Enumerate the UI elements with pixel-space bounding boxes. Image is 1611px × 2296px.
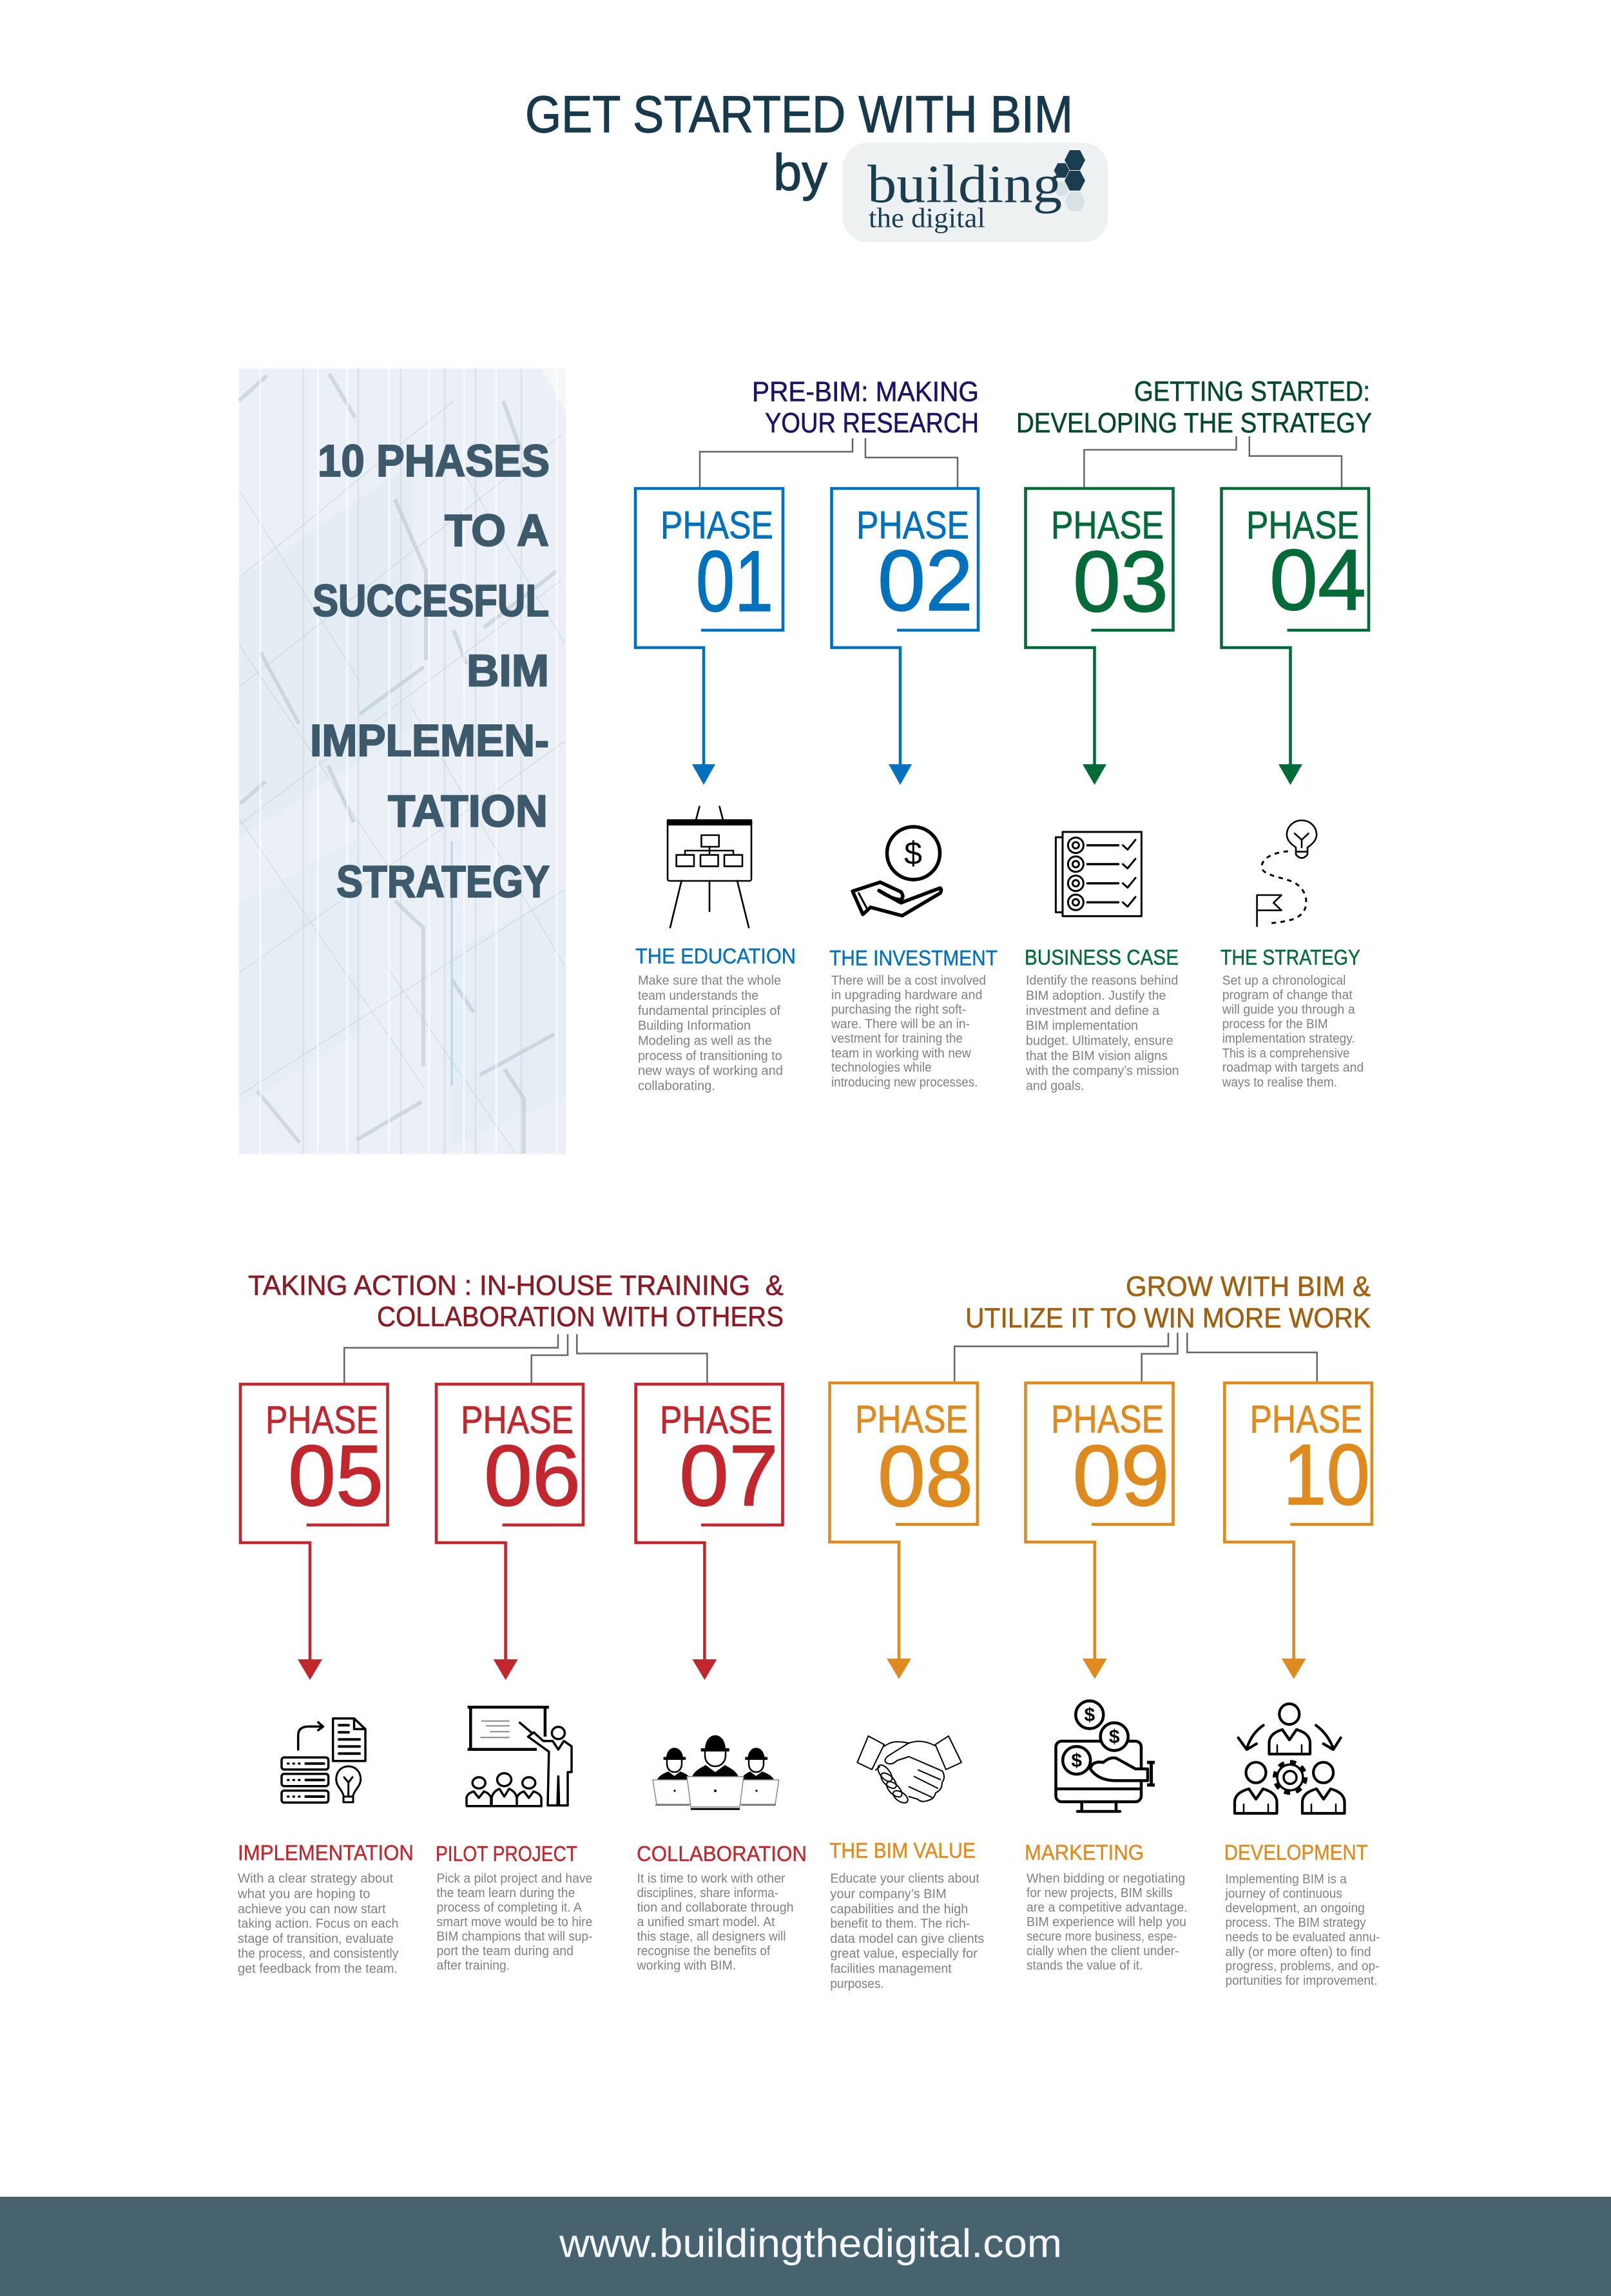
section heading: pre-BIM: PRE-BIM: MAKING <box>752 376 979 407</box>
text block: development: journey of continuous <box>1225 1887 1342 1901</box>
text block: the BIM value: THE BIM VALUE <box>829 1839 976 1863</box>
panel: phase 04 <box>1222 488 1369 785</box>
title: GET STARTED WITH BIM <box>525 86 1073 144</box>
text block: implementation: stage of transition, evaluate <box>238 1932 394 1946</box>
icon: monitor with coins and hand: $ <box>1084 1704 1095 1726</box>
panel: phase 01: 01 <box>696 534 773 630</box>
text block: the investment: vestment for training the <box>831 1032 963 1046</box>
text block: business case: and goals. <box>1026 1079 1085 1094</box>
text block: development: ally (or more often) to find <box>1226 1945 1371 1959</box>
text block: the strategy: This is a comprehensive <box>1222 1047 1349 1061</box>
text block: pilot project: port the team during and <box>437 1944 574 1958</box>
text block: development: development, an ongoing <box>1226 1902 1365 1916</box>
text block: collaboration: a unified smart model. At <box>637 1915 775 1929</box>
icon: strategy road with bulb and flag <box>1257 820 1317 926</box>
text block: marketing: secure more business, espe- <box>1027 1930 1177 1944</box>
text block: pilot project: Pick a pilot project and have <box>437 1872 592 1886</box>
text block: the investment: ware. There will be an in- <box>831 1018 970 1032</box>
text block: collaboration: this stage, all designers will <box>637 1930 786 1944</box>
text block: the strategy: will guide you through a <box>1222 1003 1356 1017</box>
text block: the education: fundamental principles of <box>638 1004 780 1018</box>
text block: pilot project: the team learn during the <box>437 1886 575 1900</box>
text block: business case: budget. Ultimately, ensure <box>1026 1034 1173 1048</box>
panel: phase 06: 06 <box>484 1428 581 1524</box>
panel: phase 08: 08 <box>878 1429 973 1525</box>
text block: marketing: MARKETING <box>1025 1841 1144 1865</box>
panel: phase 03 <box>1026 488 1173 785</box>
panel: phase 10: PHASE <box>1250 1398 1362 1441</box>
panel: phase 02 <box>831 488 978 785</box>
text block: the education: Modeling as well as the <box>638 1034 772 1048</box>
text block: pilot project: smart move would be to hire <box>437 1915 592 1929</box>
panel: phase 05: PHASE <box>265 1398 378 1442</box>
text block: the BIM value: great value, especially for <box>830 1947 978 1961</box>
text block: the investment: in upgrading hardware and <box>831 989 982 1003</box>
text block: the investment: purchasing the right soft- <box>831 1003 966 1017</box>
panel: phase 05: 05 <box>288 1428 383 1524</box>
connector lines: getting started <box>1084 436 1342 488</box>
panel: phase 02: 02 <box>878 533 973 629</box>
text block: the investment: team in working with new <box>831 1047 971 1061</box>
icon: checklist <box>1056 832 1141 916</box>
text block: the education: team understands the <box>638 989 758 1003</box>
footer banner: www.buildingthedigital.com <box>559 2222 1062 2266</box>
text block: the investment: THE INVESTMENT <box>829 947 998 970</box>
text block: implementation <box>237 1842 414 1976</box>
text block: business case: that the BIM vision aligns <box>1026 1049 1168 1063</box>
text block: the BIM value: purposes. <box>830 1977 884 1991</box>
icon: monitor with coins and hand: $ <box>1109 1726 1120 1748</box>
text block: the strategy: implementation strategy. <box>1222 1032 1355 1046</box>
panel: 10 phases intro: IMPLEMEN- <box>310 715 549 766</box>
text block: pilot project: after training. <box>437 1959 510 1973</box>
text block: the investment: introducing new processes. <box>831 1076 978 1090</box>
section heading: pre-BIM: YOUR RESEARCH <box>765 407 979 439</box>
text block: pilot project <box>436 1842 592 1973</box>
text block: the education: process of transitioning to <box>638 1049 782 1063</box>
panel: phase 01 <box>635 488 783 785</box>
text block: the BIM value: Educate your clients about <box>830 1872 979 1886</box>
icon: hand with dollar coin <box>853 827 941 916</box>
text block: marketing: When bidding or negotiating <box>1027 1872 1185 1886</box>
text block: collaboration <box>637 1842 807 1973</box>
text block: the education: collaborating. <box>638 1079 715 1094</box>
panel: 10 phases intro <box>239 369 566 1154</box>
text block: the investment: technologies while <box>831 1061 932 1075</box>
panel: phase 03: PHASE <box>1051 504 1164 546</box>
panel: 10 phases intro: TATION <box>388 786 548 836</box>
logo: building the digital: building <box>867 154 1062 214</box>
text block: the education: Building Information <box>638 1019 751 1033</box>
panel: phase 06: PHASE <box>461 1398 574 1442</box>
text block: the education <box>635 945 796 1094</box>
text block: development <box>1224 1841 1380 1988</box>
panel: phase 10 <box>1224 1383 1372 1679</box>
panel: phase 09: PHASE <box>1051 1398 1164 1441</box>
text block: implementation: achieve you can now start <box>238 1902 386 1916</box>
panel: 10 phases intro: STRATEGY <box>336 856 550 907</box>
panel: phase 07 <box>636 1384 782 1680</box>
section heading: taking action <box>248 1269 784 1333</box>
panel: 10 phases intro: BIM <box>467 646 549 696</box>
text block: implementation: With a clear strategy about <box>238 1872 393 1886</box>
panel: phase 06 <box>436 1384 583 1680</box>
logo: building the digital <box>843 143 1108 242</box>
text block: implementation: taking action. Focus on each <box>238 1917 398 1931</box>
section heading: getting started: GETTING STARTED: <box>1134 376 1370 407</box>
text block: business case: investment and define a <box>1026 1004 1160 1018</box>
text block: implementation: the process, and consistently <box>238 1947 398 1961</box>
text block: business case: BIM adoption. Justify the <box>1026 989 1166 1003</box>
panel: phase 02: PHASE <box>856 504 969 546</box>
text block: collaboration: disciplines, share informa- <box>637 1886 778 1900</box>
text block: pilot project: PILOT PROJECT <box>436 1842 577 1866</box>
panel: phase 07: 07 <box>679 1428 778 1524</box>
text block: collaboration: recognise the benefits of <box>637 1944 771 1958</box>
text block: collaboration: It is time to work with other <box>637 1872 786 1886</box>
icon: handshake <box>857 1736 961 1805</box>
section heading: grow with BIM: GROW WITH BIM & <box>1126 1271 1371 1302</box>
icon: easel with org chart <box>668 807 751 927</box>
text block: the BIM value: capabilities and the high <box>830 1902 968 1916</box>
text block: business case <box>1025 946 1179 1094</box>
panel: 10 phases intro: TO A <box>445 505 549 555</box>
panel: phase 07: PHASE <box>660 1398 773 1442</box>
text block: development: Implementing BIM is a <box>1226 1872 1347 1886</box>
text block: development: needs to be evaluated annu- <box>1226 1931 1380 1945</box>
logo: building the digital: the digital <box>869 203 985 233</box>
text block: the education: Make sure that the whole <box>638 974 781 988</box>
section heading: grow with BIM <box>965 1271 1371 1334</box>
panel: phase 08: PHASE <box>855 1398 968 1441</box>
text block: business case: Identify the reasons behind <box>1026 974 1178 988</box>
text block: the education: THE EDUCATION <box>635 945 796 969</box>
text block: the strategy: Set up a chronological <box>1222 974 1346 988</box>
text block: business case: BUSINESS CASE <box>1025 946 1179 970</box>
icon: presenter at board with audience <box>466 1707 572 1806</box>
icon: team with gear and arrows <box>1235 1704 1344 1813</box>
connector lines: pre-BIM <box>700 438 958 488</box>
section heading: taking action: TAKING ACTION : IN-HOUSE TRAINING & <box>248 1269 784 1302</box>
text block: the BIM value: benefit to them. The rich- <box>830 1917 970 1931</box>
text block: the strategy <box>1220 946 1364 1090</box>
text block: the strategy: program of change that <box>1222 989 1353 1003</box>
text block: collaboration: tion and collaborate through <box>637 1901 794 1915</box>
text block: collaboration: COLLABORATION <box>637 1842 807 1866</box>
text block: marketing: BIM experience will help you <box>1027 1915 1186 1929</box>
text block: the investment <box>829 947 998 1090</box>
text block: the strategy: THE STRATEGY <box>1220 946 1360 970</box>
section heading: taking action: COLLABORATION WITH OTHERS <box>377 1301 784 1333</box>
panel: phase 08 <box>830 1383 978 1679</box>
panel: phase 03: 03 <box>1073 534 1168 630</box>
text block: implementation: what you are hoping to <box>237 1887 370 1902</box>
icon: hand with dollar coin: $ <box>904 835 922 871</box>
connector lines: taking action <box>344 1334 707 1384</box>
by label: by <box>773 144 827 201</box>
panel: phase 09: 09 <box>1072 1428 1169 1524</box>
footer banner <box>0 2197 1611 2296</box>
text block: marketing <box>1025 1841 1188 1973</box>
text block: development: portunities for improvement. <box>1226 1974 1378 1988</box>
text block: business case: BIM implementation <box>1026 1019 1138 1033</box>
text block: collaboration: working with BIM. <box>637 1959 736 1973</box>
panel: 10 phases intro: 10 PHASES <box>318 436 550 486</box>
icon: monitor with coins and hand <box>1056 1701 1155 1811</box>
section heading: pre-BIM <box>752 376 979 439</box>
icon: servers, document and bulb <box>282 1719 365 1802</box>
text block: the BIM value: your company’s BIM <box>830 1887 947 1902</box>
section heading: getting started <box>1016 376 1372 439</box>
text block: the BIM value: data model can give clients <box>830 1932 984 1946</box>
text block: marketing: for new projects, BIM skills <box>1027 1886 1173 1900</box>
text block: development: progress, problems, and op- <box>1226 1960 1379 1974</box>
panel: phase 09 <box>1026 1383 1173 1679</box>
text block: business case: with the company’s mission <box>1025 1064 1179 1078</box>
panel: phase 10: 10 <box>1283 1427 1370 1523</box>
text block: marketing: cially when the client under- <box>1027 1944 1179 1958</box>
text block: the strategy: process for the BIM <box>1222 1018 1328 1032</box>
text block: implementation: IMPLEMENTATION <box>238 1842 414 1866</box>
text block: marketing: are a competitive advantage. <box>1027 1901 1188 1915</box>
text block: the education: new ways of working and <box>638 1064 783 1078</box>
icon: team with hard hats and laptops <box>653 1735 779 1809</box>
text block: the strategy: ways to realise them. <box>1222 1076 1337 1090</box>
text block: the investment: There will be a cost involved <box>831 974 986 988</box>
text block: marketing: stands the value of it. <box>1027 1959 1143 1973</box>
icon: monitor with coins and hand: $ <box>1071 1750 1082 1771</box>
text block: the strategy: roadmap with targets and <box>1222 1061 1364 1075</box>
panel: phase 05 <box>240 1384 388 1680</box>
text block: the BIM value <box>829 1839 984 1991</box>
text block: the BIM value: facilities management <box>830 1962 952 1976</box>
text block: development: DEVELOPMENT <box>1224 1841 1368 1865</box>
panel: phase 04: 04 <box>1269 532 1366 628</box>
section heading: grow with BIM: UTILIZE IT TO WIN MORE WORK <box>965 1302 1371 1334</box>
text block: pilot project: process of completing it. A <box>437 1901 583 1915</box>
panel: phase 04: PHASE <box>1246 504 1359 546</box>
text block: pilot project: BIM champions that will sup- <box>437 1930 592 1944</box>
connector lines: grow with BIM <box>954 1333 1317 1382</box>
panel: phase 01: PHASE <box>661 504 773 546</box>
text block: implementation: get feedback from the team. <box>238 1962 398 1976</box>
panel: 10 phases intro: SUCCESFUL <box>313 575 549 626</box>
section heading: getting started: DEVELOPING THE STRATEGY <box>1016 407 1372 439</box>
text block: development: process. The BIM strategy <box>1226 1916 1366 1930</box>
